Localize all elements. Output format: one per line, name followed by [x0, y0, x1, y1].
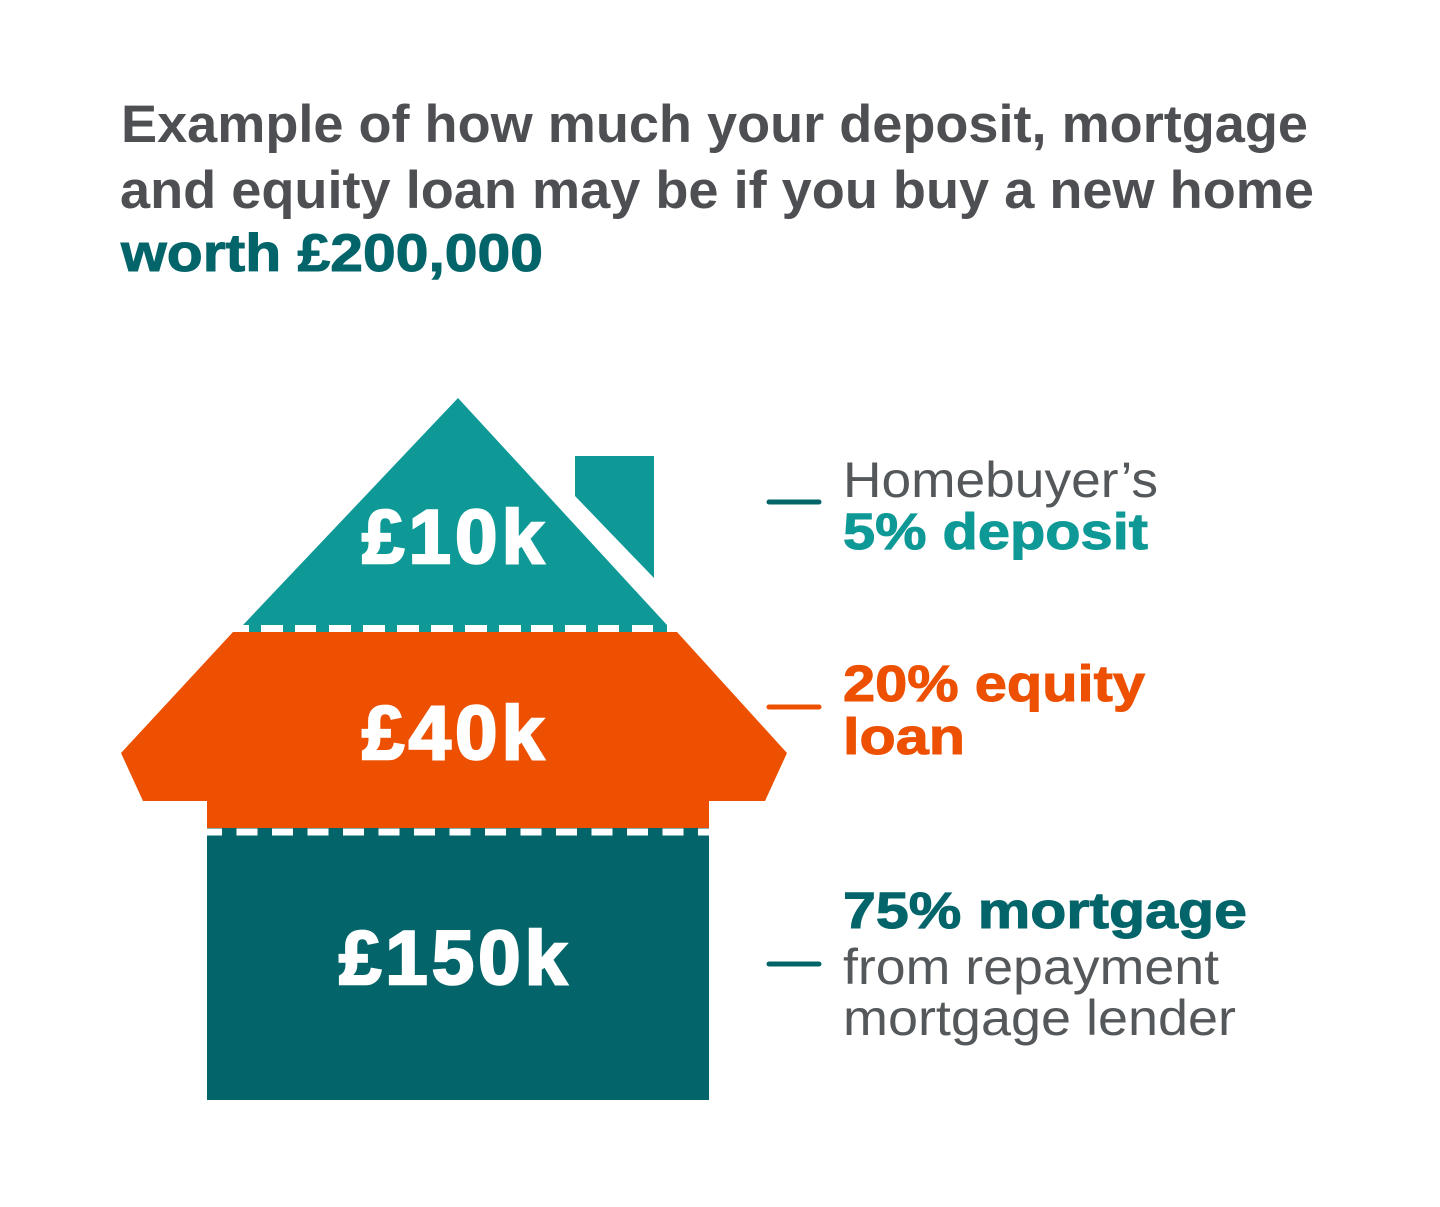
callout: deposit [769, 452, 1158, 560]
value: £40k: £40k [362, 691, 545, 776]
callout: mortgage [769, 882, 1247, 1046]
chimney [575, 456, 654, 578]
value: £150k: £150k [339, 916, 568, 1001]
title: worth £200,000 [120, 224, 543, 283]
label: equity loan: 20% equity [843, 655, 1146, 712]
label: equity loan [843, 655, 1146, 765]
title: and equity loan may be if you buy a new home [120, 161, 1314, 220]
label: deposit: Homebuyer’s [843, 452, 1158, 508]
title: Example of how much your deposit, mortgage [121, 95, 1308, 154]
callout: equity loan [769, 655, 1146, 765]
lower dashed divider [207, 828, 709, 836]
label: equity loan: loan [843, 708, 965, 765]
label: mortgage: mortgage lender [843, 990, 1236, 1046]
label: mortgage: from repayment [843, 939, 1219, 995]
value: £10k: £10k [362, 495, 545, 580]
house diagram [121, 398, 787, 1100]
leader line: deposit [769, 500, 819, 504]
label: deposit: 5% deposit [843, 503, 1148, 560]
label: mortgage: 75% mortgage [843, 882, 1247, 939]
lower segment: mortgage [207, 828, 709, 1100]
leader line: equity loan [769, 704, 819, 710]
label: deposit [843, 452, 1158, 560]
title [120, 95, 1314, 283]
middle segment: equity loan [121, 632, 787, 828]
leader line: mortgage [769, 962, 819, 966]
upper dashed divider [240, 625, 653, 632]
roof segment: deposit [243, 398, 667, 632]
label: mortgage [843, 882, 1247, 1046]
